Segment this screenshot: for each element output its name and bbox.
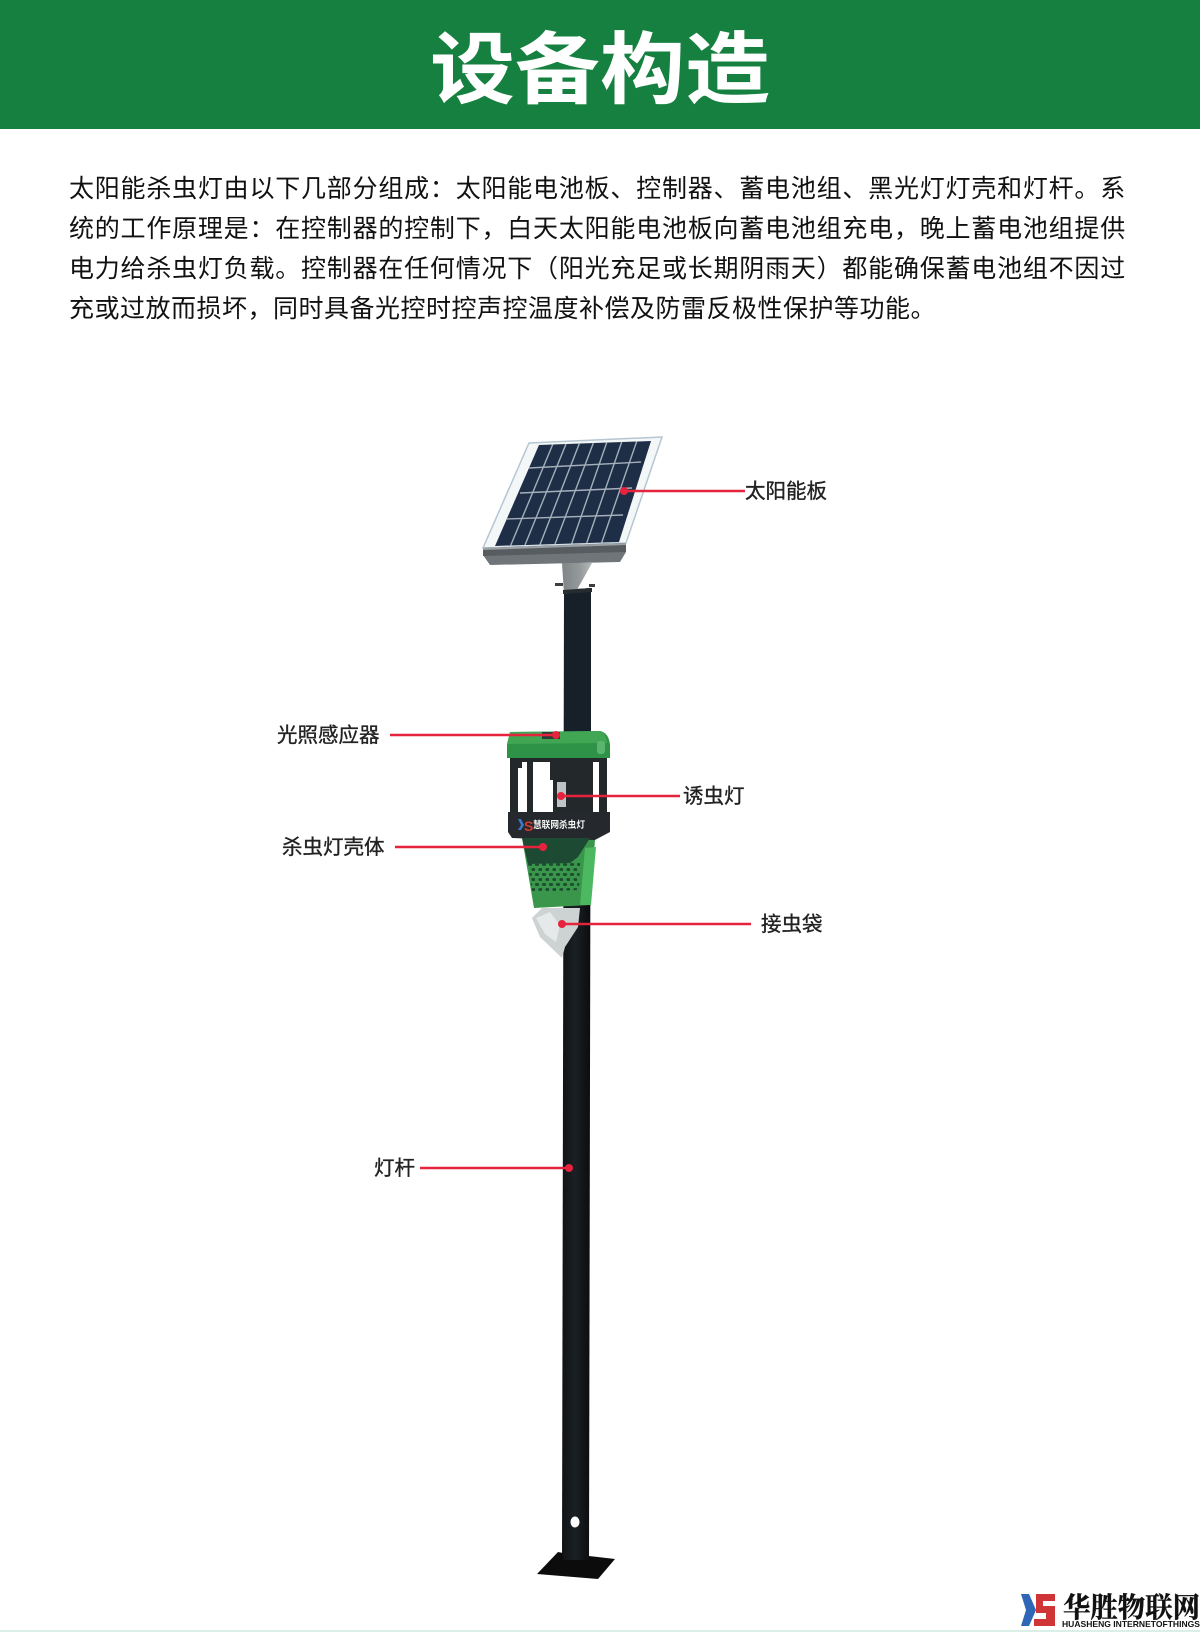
title: 设备构造 [430, 26, 770, 114]
housing logo [518, 818, 585, 834]
logo name: 华胜物联网 [1063, 1591, 1200, 1623]
callout: light sensor: 光照感应器 [277, 724, 380, 747]
callout: housing: 杀虫灯壳体 [282, 836, 384, 859]
intro text block: 充或过放而损坏，同时具备光控时控声控温度补偿及防雷反极性保护等功能。 [69, 295, 936, 323]
callout: attracting lamp: 诱虫灯 [683, 785, 744, 808]
logo mark [1021, 1594, 1055, 1626]
header banner [0, 0, 1200, 129]
intro text block [69, 175, 1126, 323]
collection bag [532, 908, 580, 958]
insect lamp housing [507, 731, 610, 958]
callout: pole [374, 1157, 573, 1180]
brand logo [1021, 1591, 1200, 1629]
callout: collection bag: 接虫袋 [761, 913, 822, 936]
callout: solar panel [620, 480, 827, 503]
solar panel [483, 437, 662, 594]
intro text block: 太阳能杀虫灯由以下几部分组成：太阳能电池板、控制器、蓄电池组、黑光灯灯壳和灯杆。系 [69, 175, 1126, 203]
logo english: HUASHENG INTERNETOFTHINGS [1062, 1619, 1200, 1629]
callout: housing [282, 836, 547, 859]
housing logo: S [524, 818, 533, 834]
callout: attracting lamp [557, 785, 744, 808]
callout: collection bag [558, 913, 822, 936]
callout: pole: 灯杆 [374, 1157, 415, 1180]
intro text block: 统的工作原理是：在控制器的控制下，白天太阳能电池板向蓄电池组充电，晚上蓄电池组提供 [69, 215, 1126, 243]
lamp pole [537, 588, 615, 1579]
intro text block: 电力给杀虫灯负载。控制器在任何情况下（阳光充足或长期阴雨天）都能确保蓄电池组不因过 [69, 255, 1126, 283]
callout: light sensor [277, 724, 560, 747]
callout: solar panel: 太阳能板 [745, 480, 827, 503]
housing logo: 慧联网杀虫灯 [533, 819, 585, 831]
